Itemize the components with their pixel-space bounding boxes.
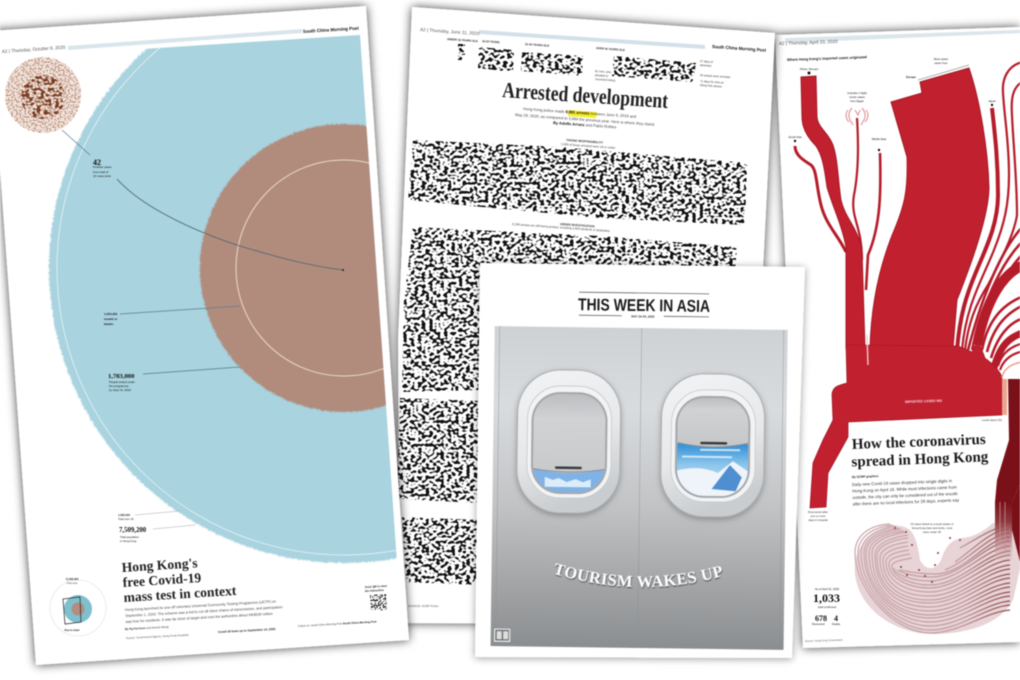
peach strip (1002, 379, 1007, 415)
origin dots and labels: cruise cases (849, 95, 865, 99)
page 2 intro text: May 29, 2020, as compared to 3,684 the previous year. Here is where they stand. (515, 112, 655, 127)
page 1 right margin (361, 34, 402, 562)
brown inner ring (235, 159, 384, 377)
leader line: upper total (135, 511, 180, 515)
QR label: the interactive (365, 588, 384, 593)
origin dots and labels: South Asia (788, 135, 802, 139)
origin dots and labels: Japan (988, 99, 996, 103)
page 1 source: Source: Government figures, Hong Kong Hospitals (126, 633, 189, 640)
origin dots and labels: Europe (906, 75, 916, 79)
origin dots and labels (788, 57, 996, 151)
label: 1,783,000 tested: People tested under (109, 380, 135, 384)
origin dots and labels: Middle East (872, 137, 887, 141)
swirl note: were under 40 (923, 530, 941, 534)
dot band: upper arrests (408, 140, 747, 225)
flows: thin curving right streams (957, 62, 1020, 370)
QR label (365, 584, 388, 593)
mini block annotations: 81 men, who (595, 69, 612, 74)
page 1 body text: September 1, 2020. The scheme was a bid to cut off silent chains of transmission, and participation (125, 605, 283, 618)
QR label: Scan QR to view (365, 584, 388, 589)
stat: total cases: As of April 22, 2020 (815, 587, 840, 591)
swirl note: Of cases linked to a local cluster in (910, 522, 954, 526)
page 1 headline: mass test in context (123, 583, 237, 605)
page 2 headline: Arrested development (502, 77, 669, 113)
label: 42 positive cases (93, 158, 112, 178)
leader line: cases (117, 179, 343, 270)
leader line: 1,783,000 (143, 367, 240, 374)
stream stripes (1000, 502, 1005, 550)
cover headline: TOURISM WAKES UP (554, 562, 723, 589)
stat: total cases (812, 587, 841, 626)
page: Covid-19 sankey (right) (775, 27, 1020, 648)
label: 1,783,000 tested: by Sept 14, 2020 (109, 388, 131, 392)
page 3 body text (852, 478, 960, 506)
gap between the two major streams (867, 335, 868, 365)
stat: total cases: Deaths (832, 622, 841, 626)
page 1 byline: By Ng Kai-kuen and Dennis Wong (125, 625, 169, 631)
mini block annotations: 72 days for riots on (700, 79, 724, 85)
dot band: large group (402, 227, 737, 392)
label: 1,783,000 tested: the programme (109, 384, 129, 388)
label: 1,000,000 group: invalid or (104, 317, 118, 321)
wave: local infections swirl (855, 523, 1020, 634)
origin dots and labels: Most cases (934, 57, 949, 61)
left window, shade nearly closed (516, 369, 621, 514)
right window sky and clouds (676, 442, 749, 474)
local cases arc (1002, 362, 1020, 378)
cabin wall seams (496, 326, 784, 650)
flow: centre stream (853, 118, 862, 260)
bracket over largest stream (918, 65, 969, 80)
page 1 footer: Covid-19 tests up to September 14, 2020 (218, 627, 276, 634)
flow: merged red mass (810, 340, 1002, 508)
wave: case dots (894, 527, 961, 583)
page 3 headline: How the coronavirus (852, 432, 986, 453)
page 3 body text: Daily new Covid-19 cases dropped into single digits in (852, 478, 953, 487)
radiating icon: cruise cluster (846, 108, 868, 125)
footnote: untraced: days in hospital (808, 518, 828, 522)
proportion chart: circles (48, 34, 398, 564)
stat: total cases: total confirmed (818, 605, 837, 609)
mini block labels: 16-20 YEARS (482, 39, 500, 44)
origin dots and labels: from Egypt (850, 99, 864, 103)
page 2 highlighted figure (568, 110, 597, 118)
band label: youth: 1,699 of those arrested were 18 or under (561, 142, 615, 150)
leader line: label 2 (120, 306, 240, 314)
locator diagram (50, 577, 106, 636)
page 1 body text: was free for residents. It was far short of target and cost the authorities about HK$530 million (126, 612, 273, 624)
label: small total: 1,585,000 (118, 513, 130, 517)
label: 7,509,200 population: in Hong Kong (120, 539, 137, 543)
flow: thin left stream (795, 146, 846, 252)
label: 1,000,000 group: 1,000,000 (104, 312, 118, 316)
page 3 date line: A2 | Thursday, April 23, 2020 (779, 39, 838, 46)
mini block annotations (595, 59, 731, 89)
label: 7,509,200 population: Total population (120, 535, 139, 539)
locator diagram: Total tests (67, 582, 78, 585)
cover masthead rules (579, 292, 709, 317)
footnote: untraced: Recovered after (808, 510, 828, 514)
footnote: untraced: one or more (810, 514, 826, 518)
stat: total cases: 4 (834, 614, 838, 623)
tested circle (198, 122, 386, 414)
label: 7,509,200 population: 7,509,200 (119, 527, 147, 534)
flow: largest imported stream (870, 68, 989, 348)
page 3 header bar (785, 30, 1020, 43)
page 1 date line: A2 | Thursday, October 8, 2020 (2, 45, 66, 54)
page: Arrested development (397, 7, 775, 625)
mini block labels: 21-30 YEARS OLD (525, 42, 549, 48)
mini block annotations: 67 days of (700, 59, 713, 64)
page: mass test circles (0, 0, 416, 672)
page 2 header bar (479, 30, 705, 49)
page 2 intro text: By Adolfo Arranz and Pablo Robles (553, 120, 616, 129)
locator diagram: 11,065,000 (66, 577, 79, 581)
label: 42 positive cases: from total of (93, 170, 108, 174)
footnote: local cases: Local cases 151 (982, 418, 1003, 422)
label: 1,000,000 group (104, 312, 118, 326)
icon: bottom-left page mark (495, 629, 510, 641)
page 3 byline: By SCMP graphics (852, 474, 879, 479)
right window, shade half open (660, 373, 765, 518)
page 1 header bar (68, 29, 302, 50)
mini block annotations: convicted rioting (595, 77, 616, 82)
population circle (48, 34, 398, 564)
page 2 date line: A2 | Thursday, June 11, 2020 (420, 27, 480, 36)
mini block annotations: pleaded or (595, 73, 608, 78)
stat: total cases: Recovered (812, 622, 825, 626)
label: small total (118, 513, 134, 521)
label: 1,783,000 tested: 1,783,000 (108, 373, 135, 380)
dot band: lower group (397, 398, 480, 503)
flow: dark red local stream (995, 379, 1020, 502)
mini block annotations: detention (700, 63, 712, 68)
page: This Week in Asia magazine cover (470, 258, 810, 664)
stream fade into swirl (995, 502, 1012, 560)
inset circle: magnified tested sample (5, 57, 81, 133)
population ring (56, 48, 396, 556)
mass label: IMPORTED CASES 882 (905, 399, 942, 404)
flow: left major stream (801, 76, 865, 348)
QR code (370, 594, 387, 611)
top mini blocks of arrests by age (458, 44, 696, 82)
mini block annotations: Mong Kok streets (700, 83, 723, 89)
origin dots and labels: Africa / Europe (800, 67, 819, 71)
swirl note (910, 522, 954, 534)
label: 42 positive cases: 16 mass tests (93, 174, 111, 178)
mini block labels (447, 37, 625, 52)
flow: stream to main mass (866, 153, 880, 290)
page 3 body text: outside, the city can only be considered out of the woods (852, 491, 958, 500)
stat: total cases: 678 (815, 614, 827, 623)
leader line: inset to label (62, 130, 90, 155)
leader line: 7,509,200 (153, 525, 195, 529)
aircraft cabin wall (491, 326, 788, 650)
band label: youth (561, 138, 615, 150)
page 1 body text: Hong Kong launched its one-off voluntary Universal Community Testing Programme (UCTP) on (125, 600, 276, 612)
band label: second group: 6,198 arrests are still being probed, including 2,600 students or graduates (512, 222, 610, 233)
label: 1,783,000 tested (108, 373, 135, 392)
swirl note: Hong Kong bars and clubs, most (912, 526, 953, 530)
page 1 body text (125, 599, 283, 624)
dark stream right edge (1012, 480, 1020, 570)
page 2 intro text (515, 106, 655, 129)
band label: second group: UNDER INVESTIGATION (560, 222, 595, 228)
mini block labels: OVER 30 YEARS OLD (596, 46, 625, 52)
mini block labels: UNDER 16 YEARS OLD (447, 37, 478, 43)
page 1 headline: free Covid-19 (122, 570, 202, 590)
label: 42 positive cases: 42 (93, 158, 101, 167)
sankey chart: how the coronavirus spread (795, 62, 1020, 634)
page 2 masthead: South China Morning Post (712, 44, 767, 53)
stat: total cases: 1,033 (813, 591, 840, 605)
footnote: untraced (808, 510, 828, 522)
label: 1,000,000 group: blanks (104, 322, 114, 326)
mini block annotations: 50 people were arrested (700, 73, 731, 79)
cover masthead: THIS WEEK IN ASIA (578, 295, 710, 316)
page 3 footer: Source: Hong Kong Government (805, 638, 843, 643)
band label: youth: TAKING RESPONSIBILITY (566, 138, 603, 145)
centre dot (342, 269, 344, 271)
page 1 masthead: South China Morning Post (303, 26, 359, 34)
page 2 source: SOURCE: SCMP, Police (408, 604, 439, 608)
page 3 chart title: Where Hong Kong's imported cases originated (787, 55, 867, 62)
left window sky (533, 469, 605, 495)
origin dots and labels: Includes 1 flight (847, 91, 867, 95)
page 3 body text: Hong Kong on April 19. While most infections came from (852, 484, 957, 493)
page 1 headline: Hong Kong's (121, 555, 198, 575)
origin dots and labels: came from (934, 61, 948, 65)
label: 42 positive cases: Positive cases (93, 165, 112, 169)
label: small total: Total over 18 (118, 517, 134, 521)
page 1 footer right: Follow us: South China Morning Post South China Morning Post (298, 619, 377, 628)
page 2 intro text: Hong Kong police made 8,981 arrests between June 9, 2019 and (523, 106, 636, 119)
label: 7,509,200 population (119, 527, 147, 543)
locator diagram: Key to chart (64, 628, 80, 632)
page 3 body text: after there are no local infections for 28 days, experts say (853, 497, 960, 506)
dot band: bottom group (402, 517, 480, 585)
page 3 headline: spread in Hong Kong (851, 449, 989, 471)
cover issue date: MAY 24-30, 2020 (631, 314, 655, 319)
